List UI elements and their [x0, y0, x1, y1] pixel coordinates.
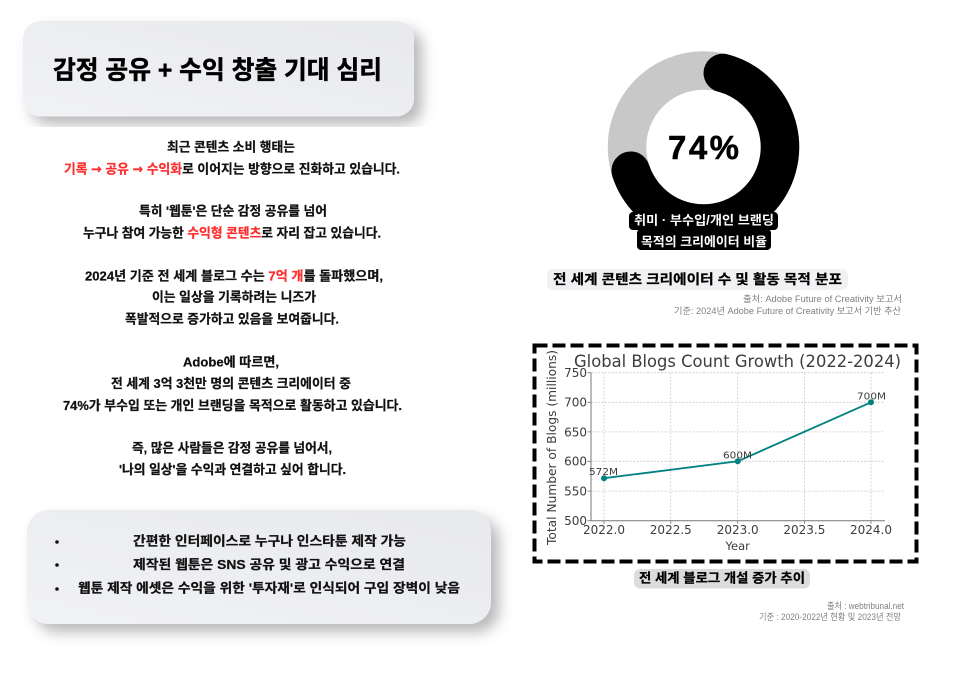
x axis ticks: 2022.5 [650, 523, 692, 537]
x axis ticks: 2024.0 [850, 523, 892, 537]
body text block: 누구나 참여 가능한 수익형 콘텐츠로 자리 잡고 있습니다. [83, 226, 381, 240]
bullet 2: 제작된 웹툰은 SNS 공유 및 광고 수익으로 연결 [133, 557, 405, 572]
donut source note: 기준: 2024년 Adobe Future of Creativity 보고서 기반 추산 [674, 306, 901, 316]
y axis title: Total Number of Blogs (millions) [545, 350, 559, 546]
x axis ticks [583, 523, 892, 537]
donut label: 취미 · 부수입/개인 브랜딩 [634, 212, 774, 228]
line chart frame [534, 346, 916, 562]
y axis ticks: 550 [564, 484, 587, 498]
body text block: 이는 일상을 기록하려는 니즈가 [152, 290, 316, 304]
donut source note [674, 293, 902, 316]
y axis ticks: 500 [564, 514, 587, 528]
donut value: 74% [668, 129, 739, 166]
title card [23, 21, 414, 116]
bullet 3: 웹툰 제작 에셋은 수익을 위한 '투자재'로 인식되어 구입 장벽이 낮음 [78, 580, 460, 596]
donut label [629, 212, 778, 250]
x axis ticks: 2023.5 [783, 523, 825, 537]
y axis ticks: 750 [564, 366, 587, 380]
y axis ticks: 650 [564, 425, 587, 439]
body text block: 특히 '웹툰'은 단순 감정 공유를 넘어 [139, 204, 327, 218]
body text block: 즉, 많은 사람들은 감정 공유를 넘어서, [132, 440, 332, 456]
line chart source note: 기준 : 2020-2022년 현황 및 2023년 전망 [759, 611, 901, 622]
y axis ticks: 600 [564, 455, 587, 469]
body text block: 기록 → 공유 → 수익화로 이어지는 방향으로 진화하고 있습니다. [64, 162, 400, 178]
body text block: 최근 콘텐츠 소비 행태는 [167, 140, 295, 154]
body text block: 2024년 기준 전 세계 블로그 수는 7억 개를 돌파했으며, [85, 268, 383, 284]
bullet 1: 간편한 인터페이스로 누구나 인스타툰 제작 가능 [133, 534, 406, 548]
title: 감정 공유 + 수익 창출 기대 심리 [53, 56, 382, 84]
body text block: 74%가 부수입 또는 개인 브랜딩을 목적으로 활동하고 있습니다. [63, 398, 402, 413]
donut source note: 출처: Adobe Future of Creativity 보고서 [743, 293, 902, 304]
data labels: 600M [723, 450, 752, 462]
donut caption: 전 세계 콘텐츠 크리에이터 수 및 활동 목적 분포 [553, 272, 842, 287]
line chart caption: 전 세계 블로그 개설 증가 추이 [639, 570, 805, 586]
body text block: 전 세계 3억 3천만 명의 콘텐츠 크리에이터 중 [111, 376, 351, 391]
data labels: 700M [857, 392, 886, 402]
data labels [589, 392, 886, 478]
line chart [545, 350, 901, 553]
body text block: '나의 일상'을 수익과 연결하고 싶어 합니다. [119, 462, 346, 477]
chart title: Global Blogs Count Growth (2022-2024) [574, 352, 901, 372]
body text block [63, 140, 402, 477]
y axis ticks [564, 366, 587, 528]
line chart source note: 출처 : webtribunal.net [827, 600, 904, 611]
data labels: 572M [589, 467, 618, 478]
x axis title: Year [725, 539, 750, 553]
body text block: 폭발적으로 증가하고 있음을 보여줍니다. [125, 312, 339, 326]
donut caption [547, 269, 848, 290]
x axis ticks: 2023.0 [717, 523, 759, 537]
donut chart 74% [627, 70, 780, 224]
x axis ticks: 2022.0 [583, 523, 625, 537]
line chart source note [759, 600, 904, 622]
y axis ticks: 700 [564, 396, 587, 410]
donut label: 목적의 크리에이터 비율 [641, 235, 767, 249]
body text block: Adobe에 따르면, [183, 354, 279, 370]
bullet card [27, 510, 491, 624]
data line [601, 399, 874, 481]
